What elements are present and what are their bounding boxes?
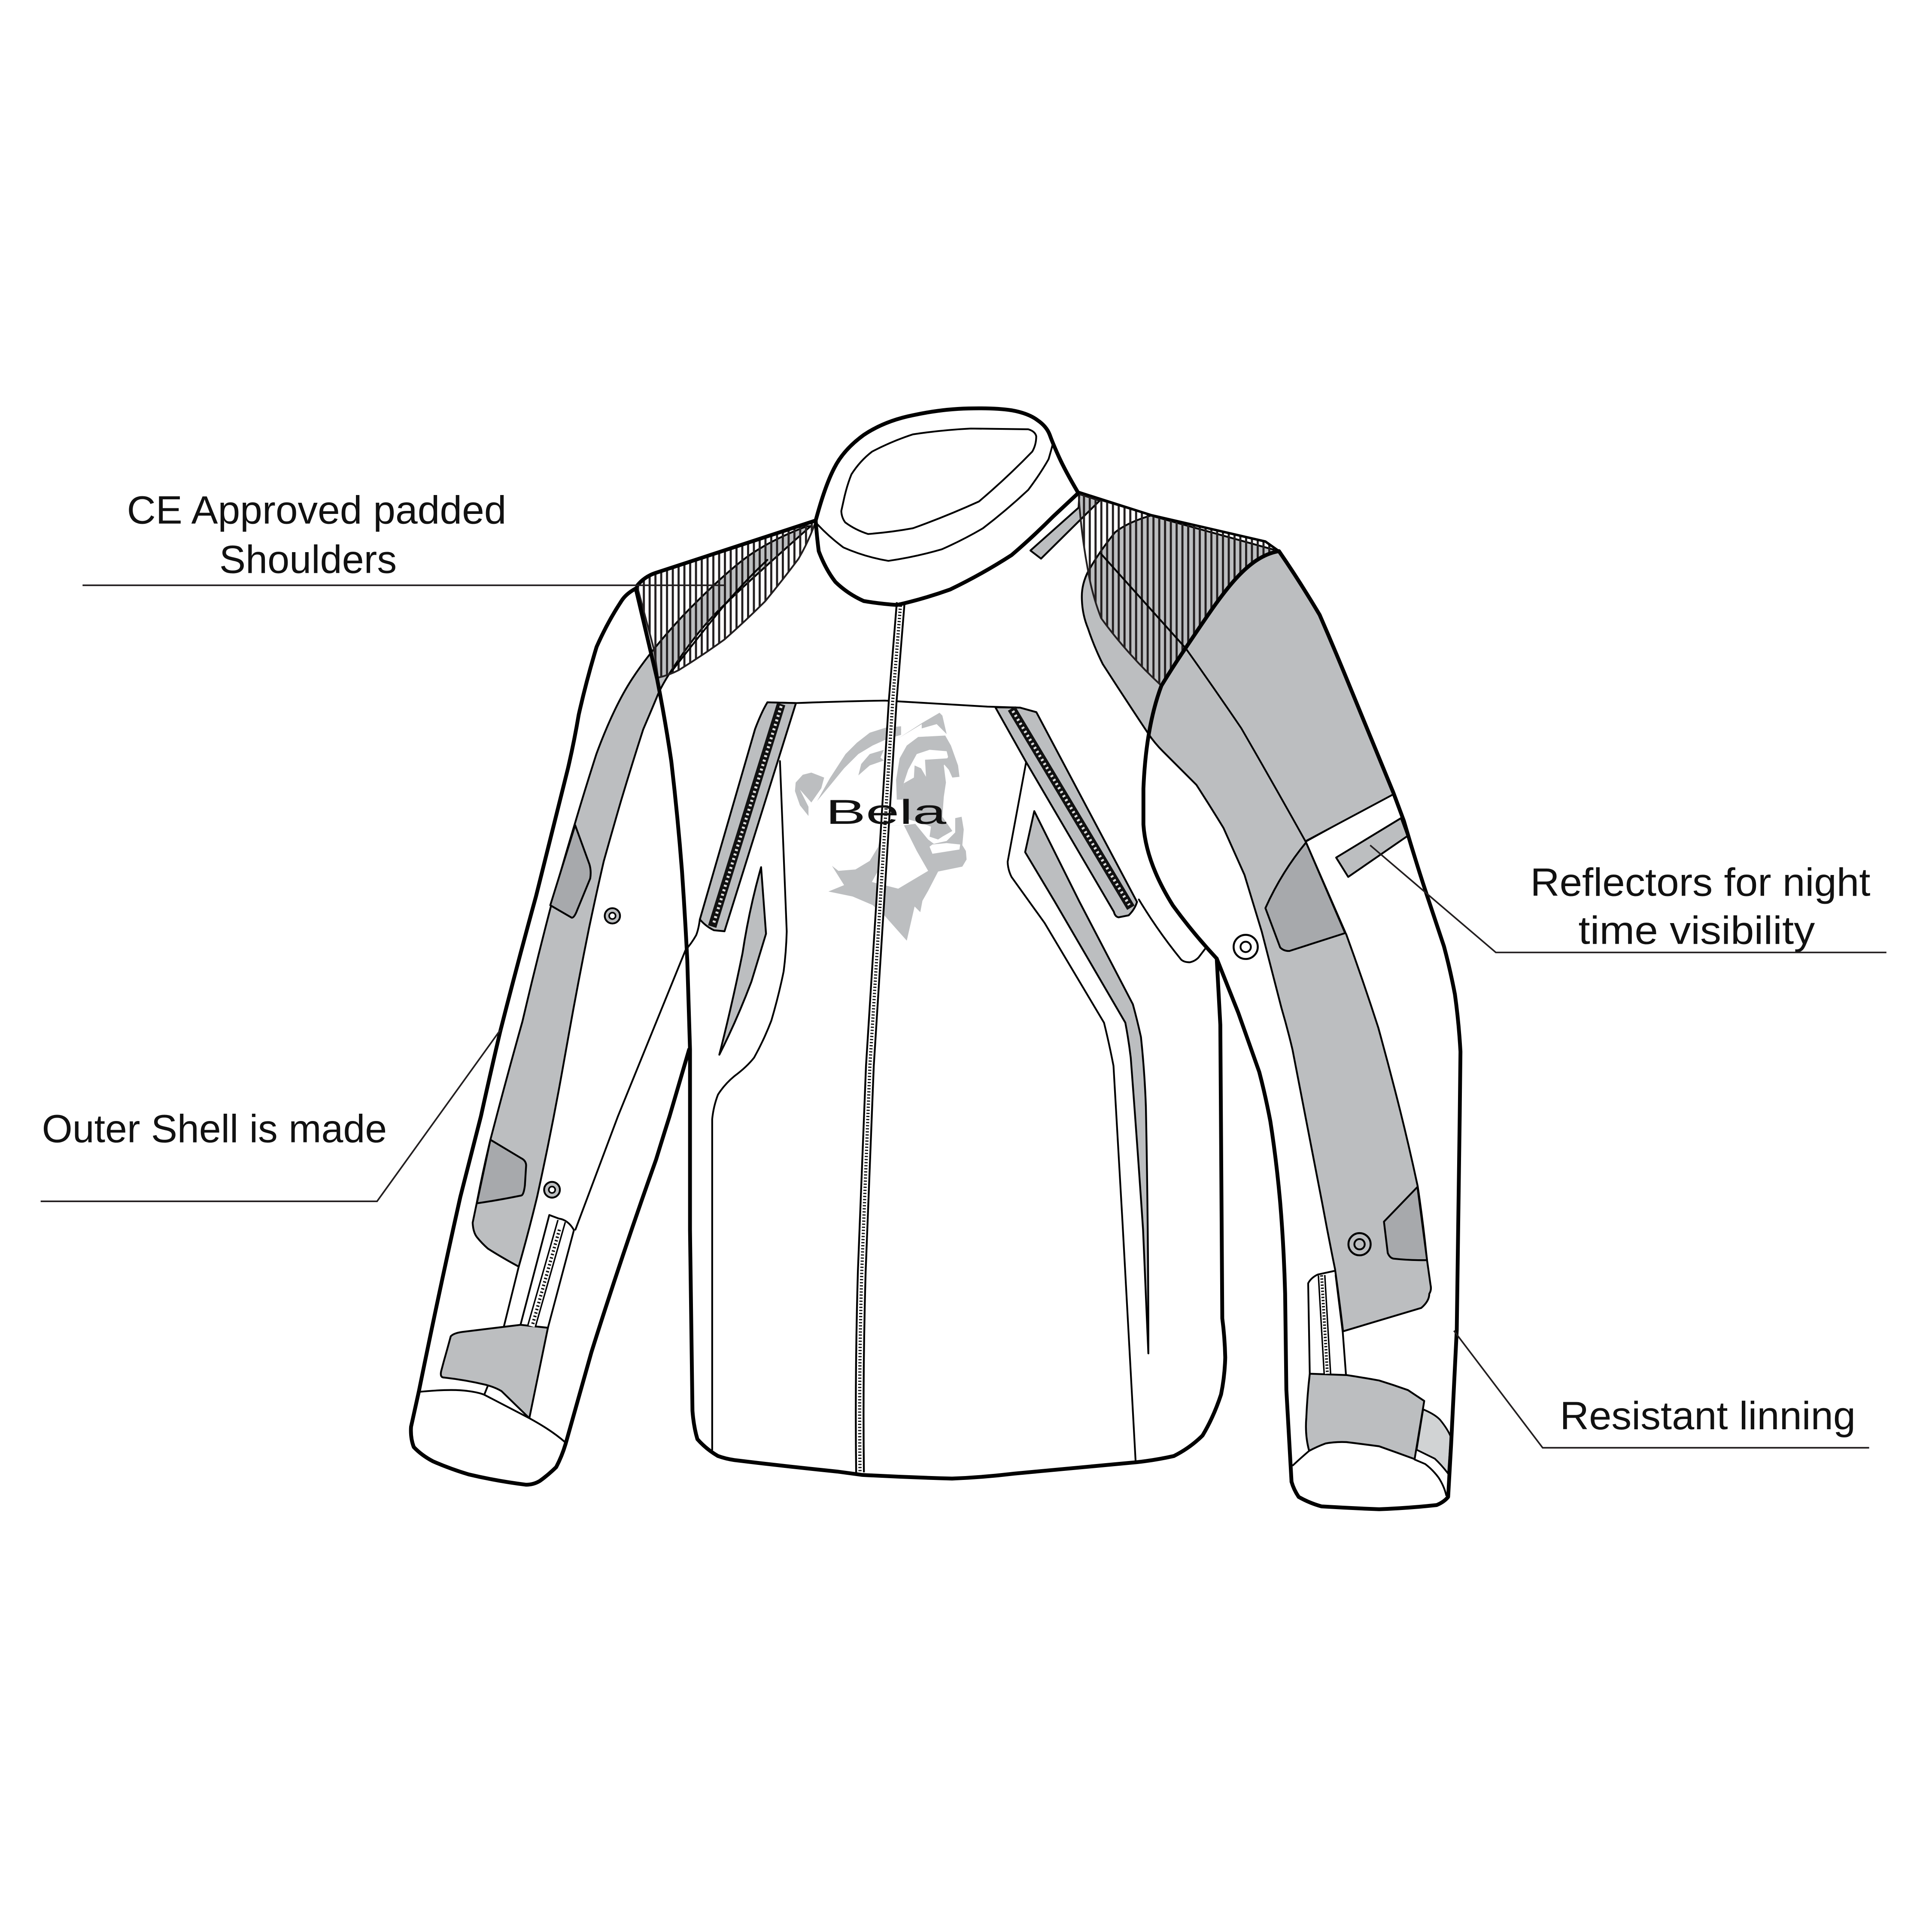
leader line (41, 1030, 500, 1201)
collar lower edge (816, 494, 1078, 605)
left shoulder inner seam (671, 560, 767, 671)
chest yoke line (767, 701, 1036, 712)
panel: right neck strip (1030, 494, 1100, 559)
label text: Shoulders (219, 538, 397, 582)
right sleeve outer outline (1279, 551, 1461, 1509)
callout: CE approved padded shoulders (82, 489, 724, 585)
panel: right cuff light strip (1417, 1410, 1451, 1473)
label text: time visibility (1578, 908, 1815, 952)
mascot: roaring bear logo (795, 713, 966, 941)
patch: left sleeve upper dark panel (550, 825, 591, 918)
right sleeve inner outline (1217, 959, 1291, 1482)
icon: left sleeve lower snap (544, 1182, 560, 1198)
panel: right sleeve gray main (1082, 516, 1431, 1331)
callout: reflectors (1370, 845, 1886, 952)
panel: right shoulder hatching (1078, 493, 1279, 686)
panel: left shoulder hatching (637, 521, 815, 677)
leader line (1370, 845, 1886, 952)
label text: Reflectors for night (1530, 860, 1871, 904)
patch: right elbow dark panel (1265, 842, 1345, 951)
right armhole seam (1143, 551, 1279, 959)
front center zipper (860, 602, 901, 1473)
patch: left sleeve lower dark panel (477, 1140, 526, 1203)
label text: CE Approved padded (127, 489, 507, 532)
left sleeve outer outline (411, 589, 689, 1485)
jacket illustration (411, 408, 1461, 1509)
leader line (82, 585, 724, 586)
reflector strip on sleeve (1336, 818, 1407, 877)
body left edge and hem (636, 589, 1225, 1479)
right shoulder top (1078, 492, 1279, 551)
collar outer outline (816, 408, 1078, 521)
icon: left sleeve upper snap (605, 908, 620, 923)
right wrist zipper (1308, 1271, 1346, 1375)
right sleeve reflector gap (1306, 794, 1454, 973)
sliver: right body gray panel (1025, 811, 1148, 1353)
sliver: left chest gray panel (719, 867, 766, 1055)
collar inner opening (841, 428, 1036, 534)
panel: left cuff tab (441, 1325, 548, 1418)
panel: left chest zipper pocket (700, 702, 796, 931)
label text: Outer Shell is made (42, 1107, 387, 1151)
logo: Bela wordmark: Bela (826, 793, 947, 832)
collar fold line (816, 444, 1053, 561)
right cuff seam (1293, 1451, 1446, 1495)
icon: right wrist snap (1349, 1233, 1370, 1255)
body seams (712, 761, 1205, 1462)
label text: Resistant linning (1560, 1394, 1856, 1438)
left forearm zipper pocket (504, 1215, 574, 1328)
panel: right cuff tab (1306, 1374, 1424, 1459)
panel: left sleeve gray band (473, 526, 811, 1267)
right shoulder diagonal seam (1101, 554, 1185, 648)
left cuff seams (419, 1386, 566, 1443)
callout: resistant lining (1454, 1331, 1869, 1448)
leader line (1454, 1331, 1869, 1448)
callout: outer shell (41, 1030, 500, 1201)
panel: right chest zipper pocket (995, 707, 1137, 917)
label text (127, 489, 507, 582)
label text (1530, 860, 1871, 952)
left shoulder top edge (637, 521, 815, 586)
patch: right wrist dark panel (1384, 1187, 1427, 1260)
left sleeve seam to pocket (575, 919, 700, 1230)
icon: right elbow snap (1233, 935, 1258, 959)
right sleeve seam (1185, 648, 1346, 933)
